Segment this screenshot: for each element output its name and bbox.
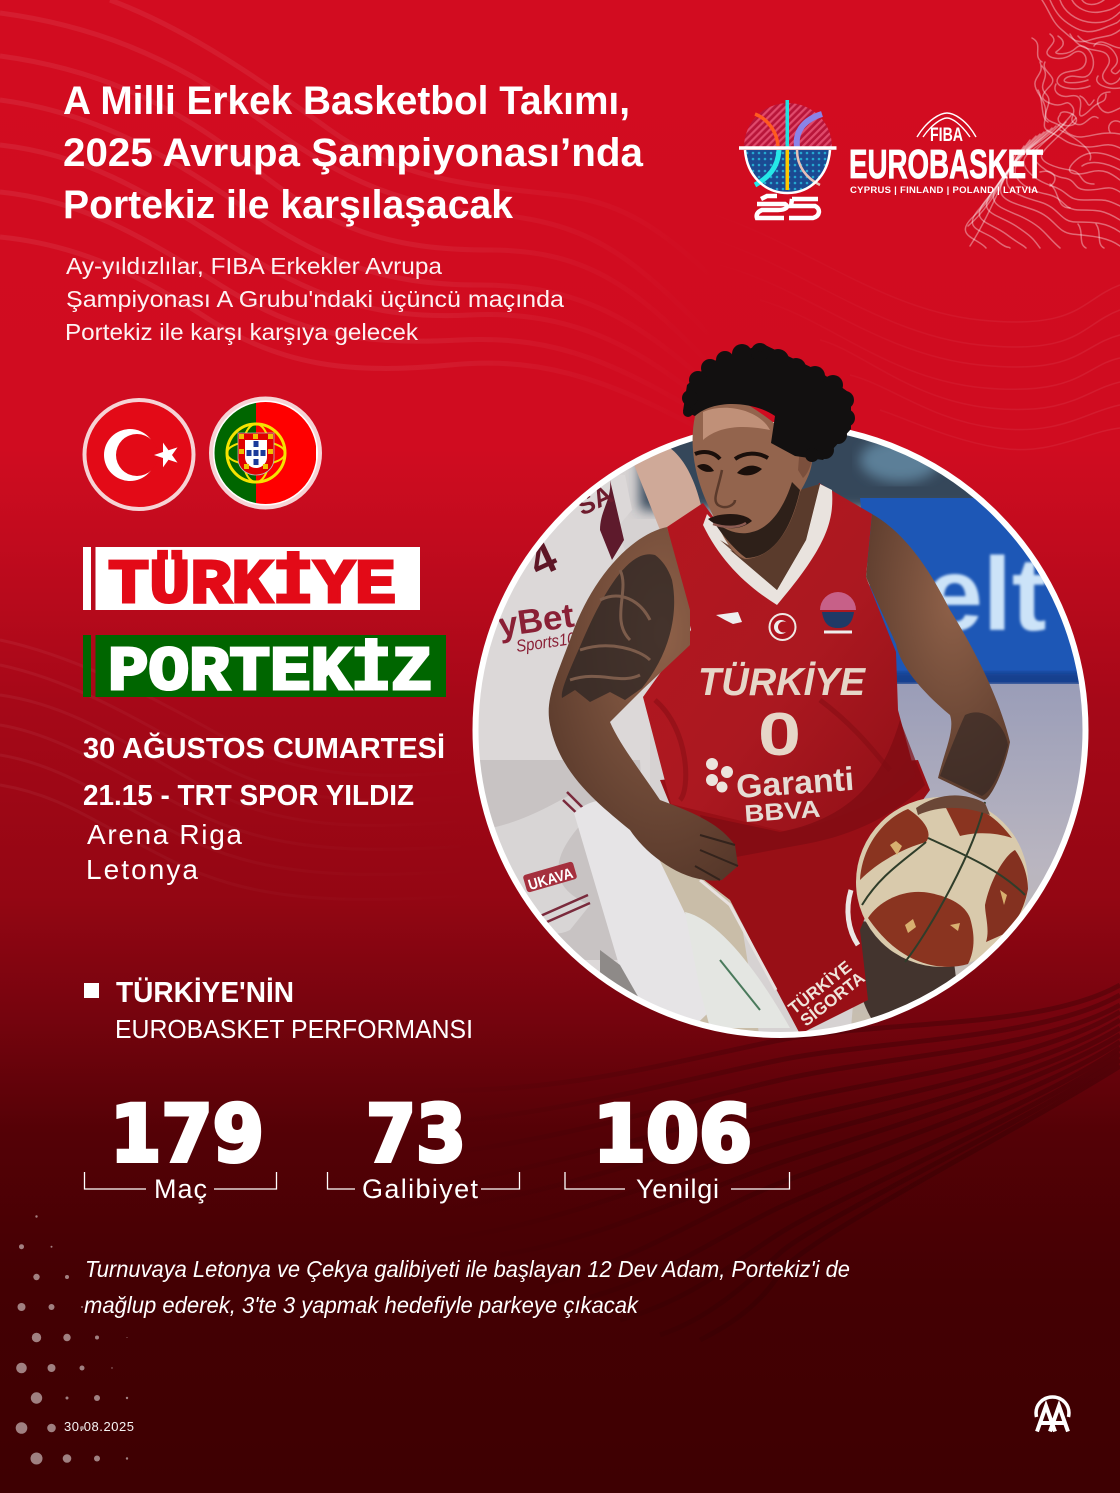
heading text xyxy=(115,976,473,1044)
date: 30.08.2025 xyxy=(64,1419,134,1434)
background waves: left middle xyxy=(0,640,480,899)
stat: matches xyxy=(84,1090,276,1204)
match info: Arena Riga xyxy=(87,819,242,850)
subtitle: Ay-yıldızlılar, FIBA Erkekler Avrupa xyxy=(66,253,443,279)
summary text xyxy=(84,1256,850,1318)
icon: globe basket xyxy=(739,100,836,218)
stat: matches: Maç xyxy=(154,1174,207,1204)
jersey badges xyxy=(716,592,856,640)
player photo xyxy=(470,343,1095,1040)
title: Portekiz ile karşılaşacak xyxy=(63,183,514,227)
label: turkiye: TÜRKİYE xyxy=(108,550,396,621)
decorative dots xyxy=(16,1215,128,1464)
jersey torso xyxy=(643,483,916,831)
match info: 30 AĞUSTOS CUMARTESİ xyxy=(83,731,445,765)
jersey lettering: TÜRKİYE xyxy=(698,661,866,704)
jersey lettering: TÜRKİYE xyxy=(785,957,855,1018)
title: 2025 Avrupa Şampiyonası’nda xyxy=(63,131,644,175)
fiba arcs xyxy=(917,113,976,137)
neck and chest xyxy=(720,484,820,590)
heading text: TÜRKİYE'NİN xyxy=(116,976,294,1009)
background waves: right middle xyxy=(700,210,1120,450)
defender: UKAVA xyxy=(526,865,575,894)
left arm with tattoos xyxy=(549,527,738,881)
defender: Sports100 xyxy=(515,628,585,656)
jersey lettering xyxy=(698,661,868,1030)
stat: losses: 106 xyxy=(593,1090,752,1180)
photo ring xyxy=(476,425,1086,1035)
subtitle: Portekiz ile karşı karşıya gelecek xyxy=(65,319,418,345)
background waves: bottom right bands xyxy=(360,985,1120,1340)
heading text: EUROBASKET PERFORMANSI xyxy=(115,1016,473,1044)
jersey lettering: 0 xyxy=(758,701,801,768)
logo: eurobasket xyxy=(739,100,1043,218)
stat: losses xyxy=(565,1090,790,1204)
stat: losses: Yenilgi xyxy=(636,1174,719,1204)
defender: 4 xyxy=(522,532,565,587)
section heading xyxy=(84,976,473,1044)
hair xyxy=(682,343,855,462)
defender xyxy=(470,440,790,1040)
jersey collar xyxy=(703,484,832,605)
decorative fingerprint pattern xyxy=(965,0,1120,248)
bullet xyxy=(84,983,99,998)
label: portekiz: PORTEKİZ xyxy=(108,637,432,708)
match info: 21.15 - TRT SPOR YILDIZ xyxy=(83,780,414,812)
flag: portugal xyxy=(210,398,320,508)
match info xyxy=(83,731,445,885)
stat: matches: 179 xyxy=(110,1090,264,1180)
host countries: CYPRUS | FINLAND | POLAND | LATVIA xyxy=(850,185,1038,196)
shorts xyxy=(660,760,930,1034)
jersey lettering: SİGORTA xyxy=(797,968,868,1030)
subtitle xyxy=(65,253,565,345)
stat: wins: 73 xyxy=(366,1090,466,1180)
photo backdrop: elt xyxy=(925,537,1046,653)
flag: turkey xyxy=(84,400,194,509)
player's lower leg xyxy=(860,921,956,1018)
defender: yBet xyxy=(496,597,576,645)
photo backdrop xyxy=(470,420,1095,1040)
summary text: mağlup ederek, 3'te 3 yapmak hedefiyle parkeye çıkacak xyxy=(84,1292,639,1318)
jersey lettering: Garanti xyxy=(735,760,855,805)
basketball xyxy=(856,797,1028,967)
right arm xyxy=(866,514,1010,800)
player head xyxy=(682,343,855,590)
match info: Letonya xyxy=(86,854,198,885)
title xyxy=(63,79,644,227)
icon: anadolu agency logo xyxy=(1036,1397,1069,1432)
stat: wins: Galibiyet xyxy=(362,1174,478,1204)
summary text: Turnuvaya Letonya ve Çekya galibiyeti ile başlayan 12 Dev Adam, Portekiz'i de xyxy=(85,1256,850,1282)
title: A Milli Erkek Basketbol Takımı, xyxy=(63,79,630,123)
background waves: top left xyxy=(0,0,760,440)
hand on ball xyxy=(916,795,990,815)
fiba wordmark: FIBA xyxy=(930,125,963,146)
subtitle: Şampiyonası A Grubu'ndaki üçüncü maçında xyxy=(66,286,565,312)
defender: SA xyxy=(572,479,617,521)
jersey lettering: BBVA xyxy=(744,796,821,828)
stat: wins xyxy=(328,1090,520,1204)
